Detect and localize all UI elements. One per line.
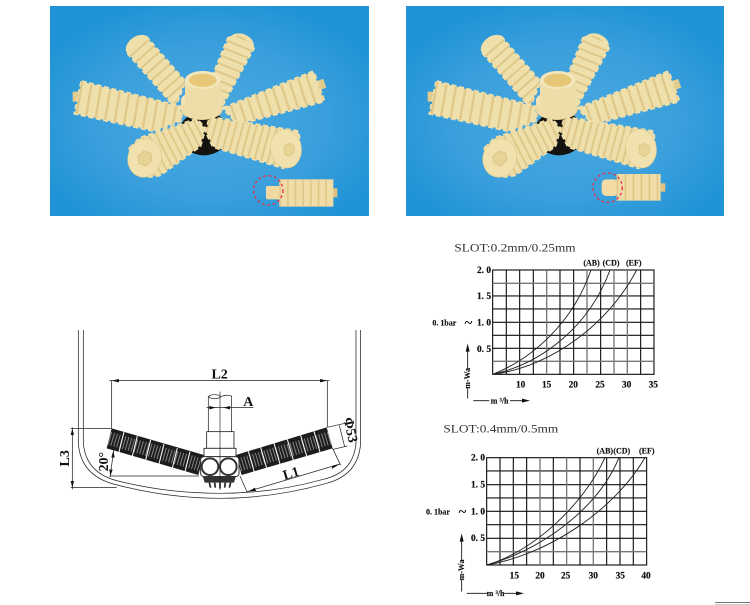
chart: slot 0.4mm/0.5mm bbox=[426, 422, 655, 598]
curve labels: (CD) bbox=[613, 447, 631, 456]
x axis labels: 25 bbox=[561, 571, 571, 581]
y axis labels bbox=[426, 454, 485, 544]
dimension L2 bbox=[109, 367, 329, 428]
right filter arm bbox=[236, 427, 333, 475]
dimension A bbox=[207, 395, 253, 410]
flow curves bbox=[493, 270, 637, 374]
grid bbox=[487, 458, 647, 565]
curve labels bbox=[597, 447, 655, 456]
curve labels bbox=[583, 259, 642, 268]
axis arrows and units: m-Wa bbox=[463, 368, 472, 389]
x axis labels: 35 bbox=[616, 571, 625, 581]
x axis labels: 15 bbox=[542, 381, 552, 391]
y axis labels: ~ bbox=[465, 316, 473, 332]
dimension L3 bbox=[58, 427, 117, 489]
x axis labels bbox=[516, 381, 658, 391]
icon: single filter element bbox=[266, 179, 337, 207]
x axis labels: 35 bbox=[649, 381, 658, 391]
x axis labels: 20 bbox=[535, 571, 545, 581]
y axis labels: 1. 0 bbox=[471, 507, 485, 517]
icon: red dashed circle bbox=[593, 173, 622, 202]
dimension diameter 53: Φ53 bbox=[340, 416, 360, 444]
dimension L3: L3 bbox=[58, 450, 73, 466]
dimension 20 degrees: 20° bbox=[97, 452, 112, 471]
chart: slot 0.2mm/0.25mm bbox=[432, 241, 658, 405]
icon: six-arm filter assembly bbox=[428, 30, 681, 181]
y axis labels: 0. 5 bbox=[477, 345, 491, 355]
dimension A: A bbox=[243, 395, 253, 410]
y axis labels: 0. 1bar bbox=[432, 319, 457, 328]
panel: product photo, left bbox=[50, 6, 369, 216]
technical drawing: tank cross-section bbox=[58, 330, 361, 498]
axis arrows and units bbox=[463, 344, 530, 405]
curve labels: (CD) bbox=[603, 259, 620, 268]
y axis labels: 0. 5 bbox=[471, 534, 485, 544]
flow curves bbox=[487, 458, 645, 565]
chart title: SLOT:0.2mm/0.25mm bbox=[454, 241, 576, 255]
icon: red dashed circle bbox=[254, 176, 283, 205]
center hub and shaft bbox=[201, 392, 239, 490]
chart title: SLOT:0.4mm/0.5mm bbox=[443, 422, 559, 436]
axis arrows and units: m-Wa bbox=[457, 560, 466, 580]
y axis labels: 2. 0 bbox=[477, 266, 491, 276]
y axis labels: 1. 0 bbox=[477, 318, 491, 328]
x axis labels: 30 bbox=[589, 571, 598, 581]
x axis labels: 30 bbox=[622, 381, 632, 391]
dimension L1 bbox=[240, 448, 341, 493]
x axis labels: 10 bbox=[516, 381, 526, 391]
curve labels: (EF) bbox=[626, 259, 642, 268]
x axis labels: 25 bbox=[595, 381, 605, 391]
y axis labels: 1. 5 bbox=[477, 292, 491, 302]
curve labels: (AB) bbox=[583, 259, 600, 268]
x axis labels: 15 bbox=[510, 571, 519, 581]
dimension L1: L1 bbox=[281, 465, 301, 484]
axis arrows and units bbox=[457, 533, 524, 598]
x axis labels bbox=[510, 571, 651, 581]
icon: single filter element bbox=[602, 174, 665, 201]
dimension diameter 53 bbox=[327, 416, 360, 449]
axis arrows and units: m ³/h bbox=[487, 589, 505, 598]
axis arrows and units: m ³/h bbox=[491, 396, 509, 405]
panel: product photo, right bbox=[406, 6, 724, 216]
grid bbox=[493, 270, 654, 374]
y axis labels: 0. 1bar bbox=[426, 508, 450, 517]
x axis labels: 40 bbox=[641, 571, 651, 581]
y axis labels: ~ bbox=[459, 505, 467, 521]
curve labels: (AB) bbox=[597, 447, 613, 456]
dimension 20 degrees bbox=[97, 448, 199, 477]
x axis labels: 20 bbox=[569, 381, 578, 391]
dimension L2: L2 bbox=[211, 367, 228, 382]
y axis labels bbox=[432, 266, 491, 355]
icon: six-arm filter assembly bbox=[73, 30, 326, 181]
y axis labels: 1. 5 bbox=[471, 480, 485, 490]
left filter arm bbox=[107, 428, 204, 475]
curve labels: (EF) bbox=[639, 447, 655, 456]
y axis labels: 2. 0 bbox=[471, 454, 485, 464]
